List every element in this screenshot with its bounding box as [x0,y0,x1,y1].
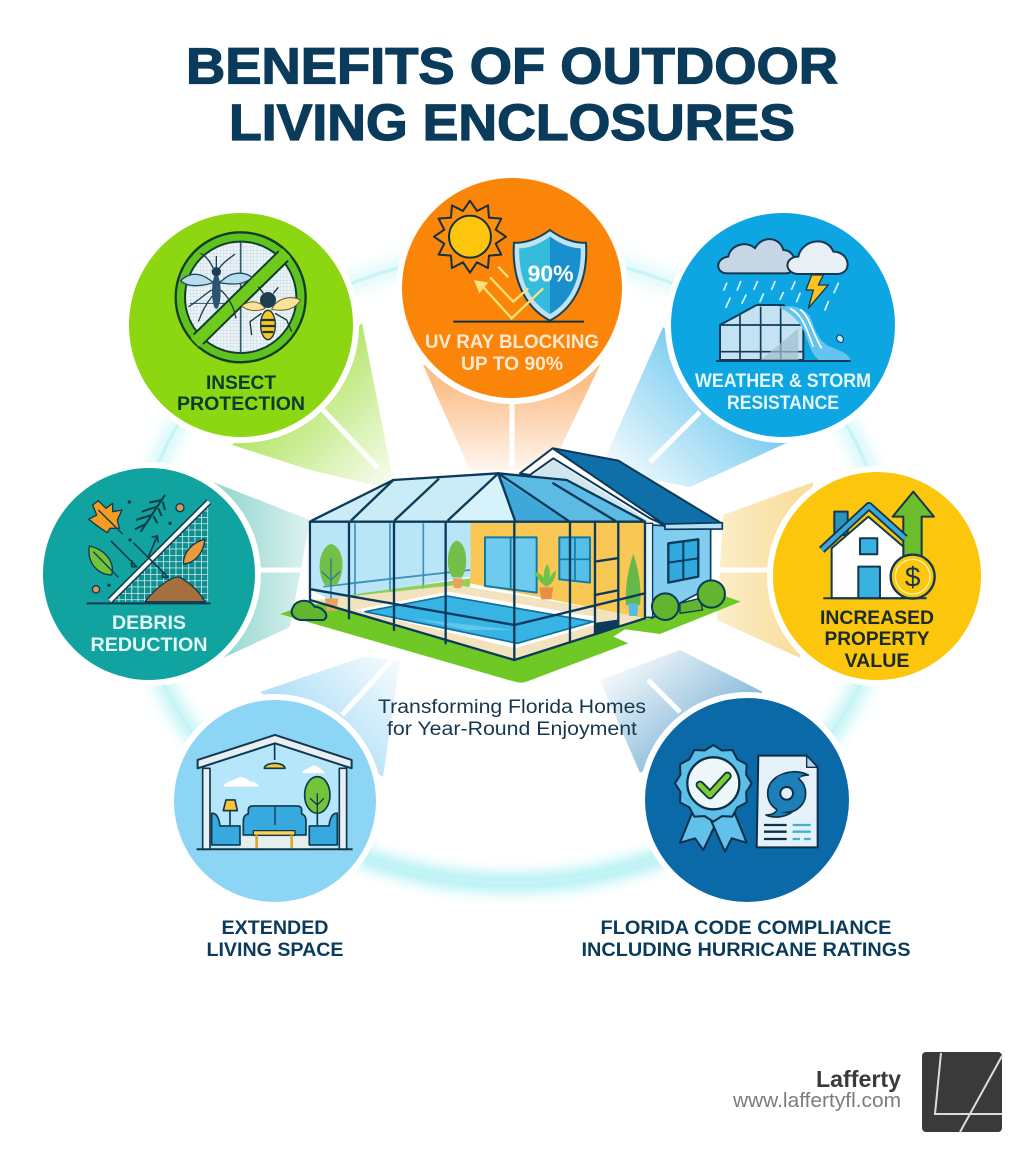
label: extended living space: LIVING SPACE [206,939,344,961]
windows and plants [485,537,537,593]
center caption: for Year-Round Enjoyment [387,719,638,740]
panel: debris reduction [40,465,258,683]
panel: insect protection [126,210,356,440]
label: INSECT [206,372,276,394]
screen roof [312,473,515,521]
label: UV RAY BLOCKING [425,331,599,353]
panel: florida code compliance [642,695,852,905]
label [90,612,208,656]
label [695,370,871,414]
title: LIVING ENCLOSURES [229,94,795,151]
label: extended living space [206,917,344,961]
house with pool enclosure [280,448,741,683]
panel: UV ray blocking [399,175,625,401]
icon: sun and shield: 90% [528,261,574,287]
label: REDUCTION [90,634,208,656]
panel: weather and storm resistance [668,210,898,440]
label [177,372,305,415]
label: INCREASED [820,607,934,629]
brand name and url [732,1066,901,1112]
icon: covered lounge [197,735,353,849]
center caption: Transforming Florida Homes [378,697,646,718]
icon: storm over enclosure [716,239,851,361]
label: RESISTANCE [727,392,839,414]
label: florida code compliance: INCLUDING HURRICANE RATINGS [582,939,910,961]
label: extended living space: EXTENDED [222,917,328,939]
connecting ring [137,253,887,883]
rear screen wall [312,523,471,600]
label [820,607,934,672]
panel: increased property value [770,469,984,683]
icon: house with rising value: $ [905,562,921,593]
brand name and url: www.laffertyfl.com [732,1090,901,1112]
label: VALUE [844,650,910,672]
icon: badge and hurricane document [675,745,818,852]
label: WEATHER & STORM [695,370,871,392]
icon: house with rising value [822,492,935,599]
center caption [378,697,646,740]
label: florida code compliance [582,917,910,961]
icon: sun and shield [434,201,586,322]
panel: extended living space [171,697,379,905]
brand name and url: Lafferty [816,1066,901,1092]
title: BENEFITS OF OUTDOOR [186,38,838,94]
label: PROTECTION [177,393,305,415]
title [186,38,838,151]
main house wall and roof [470,448,722,618]
enclosure frame [310,473,645,660]
icon: leaves blocked by screen [87,495,211,603]
deck and pool [312,585,645,660]
logo mark [922,1052,1002,1132]
label [425,331,599,375]
label: florida code compliance: FLORIDA CODE COMPLIANCE [600,917,892,939]
label: UP TO 90% [461,353,563,375]
label: PROPERTY [824,628,930,650]
lawn [280,597,741,683]
label: DEBRIS [112,612,186,634]
icon: no insects screen [176,232,306,362]
rays from house to benefits [213,323,813,777]
